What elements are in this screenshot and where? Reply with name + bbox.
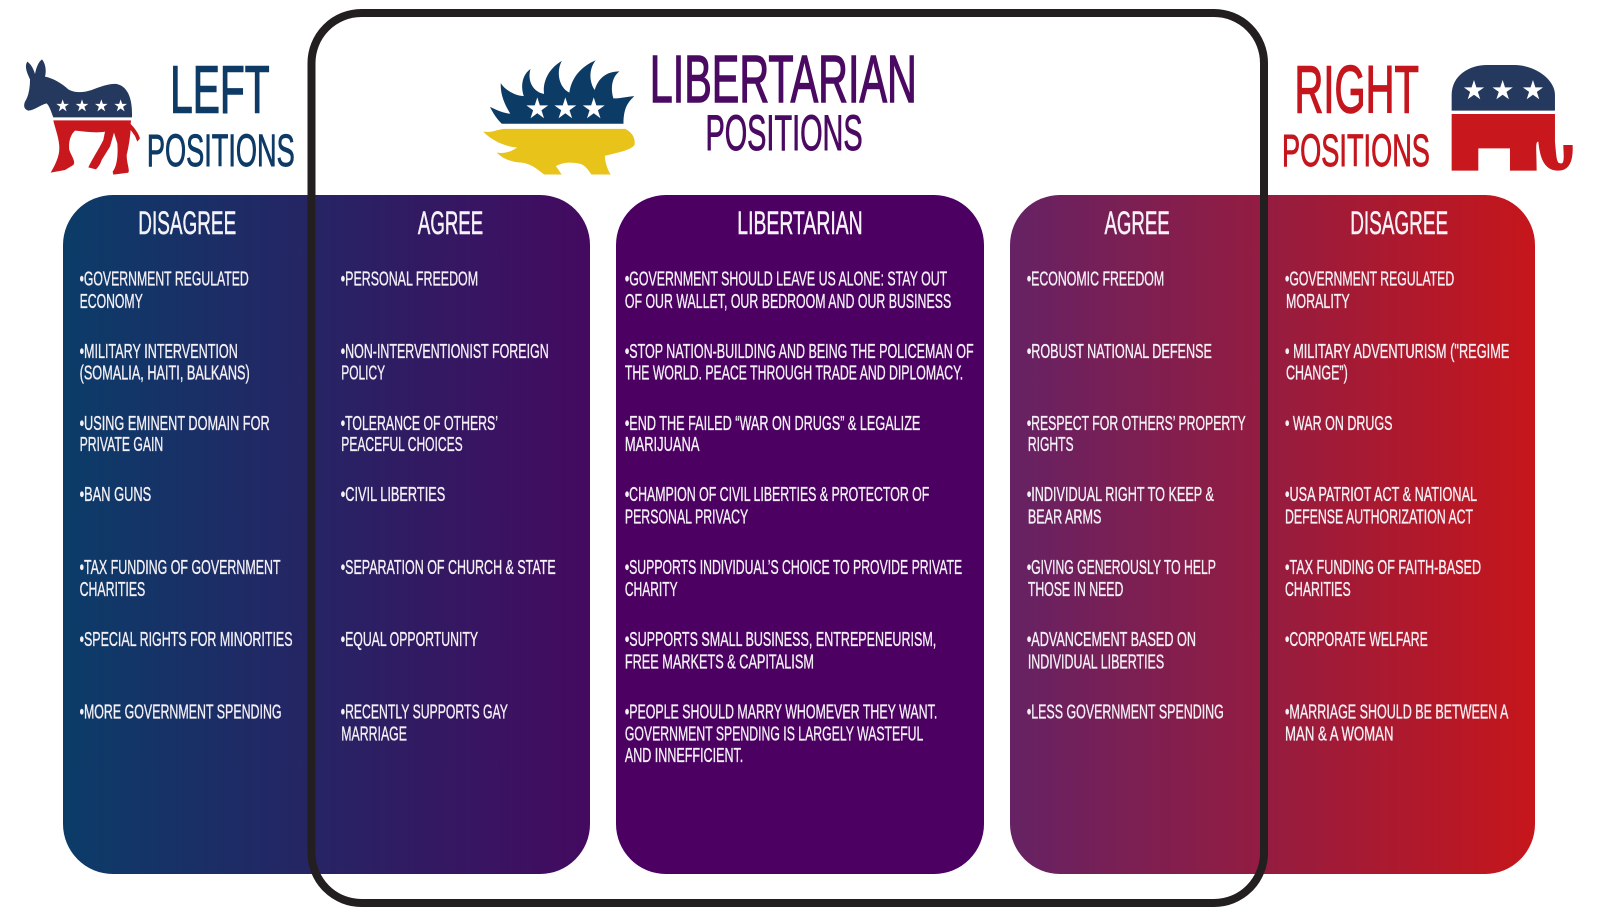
list: left agree positions: •CIVIL LIBERTIES: [341, 484, 445, 506]
list: right agree positions: •ADVANCEMENT BASED ON: [1027, 629, 1196, 651]
list: right agree positions: •LESS GOVERNMENT SPENDING: [1027, 701, 1224, 724]
panel: libertarian center: [616, 195, 984, 874]
list: right agree positions: •ECONOMIC FREEDOM: [1027, 268, 1164, 291]
icon: republican elephant: [1452, 65, 1573, 171]
list: libertarian positions: •SUPPORTS SMALL BUSINESS, ENTREPENEURISM,: [625, 629, 936, 651]
list: left agree positions: •SEPARATION OF CHURCH & STATE: [341, 557, 556, 579]
title: libertarian positions: POSITIONS: [705, 105, 863, 161]
list: right disagree positions: MAN & A WOMAN: [1285, 723, 1393, 745]
list: libertarian positions: GOVERNMENT SPENDING IS LARGELY WASTEFUL: [625, 723, 923, 745]
list: libertarian positions: •END THE FAILED “WAR ON DRUGS” & LEGALIZE: [625, 413, 920, 435]
list: libertarian positions: FREE MARKETS & CAPITALISM: [625, 651, 814, 673]
list: left disagree positions: •GOVERNMENT REGULATED: [80, 268, 249, 291]
list: left agree positions: •TOLERANCE OF OTHERS’: [341, 413, 498, 435]
icon: libertarian porcupine: [483, 60, 635, 174]
list: left disagree positions: •TAX FUNDING OF GOVERNMENT: [80, 557, 281, 579]
list: libertarian positions: •GOVERNMENT SHOULD LEAVE US ALONE: STAY OUT: [625, 268, 947, 291]
list: libertarian positions: MARIJUANA: [625, 434, 700, 456]
list: left disagree positions: •MORE GOVERNMENT SPENDING: [80, 701, 282, 724]
title: left positions: [147, 53, 295, 176]
title: left positions: LEFT: [170, 53, 270, 128]
list: libertarian positions: THE WORLD. PEACE THROUGH TRADE AND DIPLOMACY.: [625, 363, 963, 385]
list: left disagree positions: CHARITIES: [80, 579, 145, 601]
list: right agree positions: •INDIVIDUAL RIGHT TO KEEP &: [1027, 484, 1214, 506]
list: right agree positions: •ROBUST NATIONAL DEFENSE: [1027, 341, 1212, 363]
list: left agree positions: PEACEFUL CHOICES: [341, 434, 463, 456]
list: libertarian positions: CHARITY: [625, 579, 678, 601]
list: right agree positions: •GIVING GENEROUSLY TO HELP: [1027, 557, 1216, 579]
list: left agree positions: MARRIAGE: [341, 723, 407, 745]
list: left agree positions: •PERSONAL FREEDOM: [341, 268, 478, 291]
list: left agree positions: •NON-INTERVENTIONIST FOREIGN: [341, 341, 549, 363]
panel: left disagree and agree: [63, 195, 590, 874]
frame: libertarian overlap outline: [312, 13, 1264, 903]
list: left agree positions: •RECENTLY SUPPORTS GAY: [341, 701, 508, 724]
heading: right disagree: DISAGREE: [1350, 205, 1448, 241]
list: right disagree positions: CHANGE”): [1286, 363, 1348, 385]
list: right disagree positions: •GOVERNMENT REGULATED: [1285, 268, 1454, 291]
list: right disagree positions: DEFENSE AUTHORIZATION ACT: [1285, 507, 1473, 529]
title: libertarian positions: [650, 43, 917, 161]
list: left disagree positions: •BAN GUNS: [80, 484, 151, 506]
list: right disagree positions: CHARITIES: [1285, 579, 1351, 601]
list: right disagree positions: •CORPORATE WELFARE: [1285, 629, 1428, 651]
list: libertarian positions: •STOP NATION-BUILDING AND BEING THE POLICEMAN OF: [625, 341, 974, 363]
heading: right agree: AGREE: [1104, 205, 1170, 241]
list: right agree positions: [1027, 268, 1246, 724]
list: right disagree positions: •TAX FUNDING OF FAITH-BASED: [1285, 557, 1481, 579]
title: left positions: POSITIONS: [147, 125, 295, 176]
list: left agree positions: •EQUAL OPPORTUNITY: [341, 629, 478, 651]
panel: right agree and disagree: [1010, 195, 1535, 874]
list: left disagree positions: •SPECIAL RIGHTS FOR MINORITIES: [80, 629, 293, 651]
heading: left disagree: DISAGREE: [138, 205, 236, 241]
list: right agree positions: THOSE IN NEED: [1028, 579, 1123, 601]
title: libertarian positions: LIBERTARIAN: [650, 43, 917, 117]
icon: democrat donkey: [24, 59, 140, 175]
list: left disagree positions: [80, 268, 293, 724]
list: left agree positions: POLICY: [341, 363, 385, 385]
list: right agree positions: INDIVIDUAL LIBERTIES: [1028, 651, 1164, 673]
title: right positions: [1282, 53, 1430, 176]
list: libertarian positions: OF OUR WALLET, OUR BEDROOM AND OUR BUSINESS: [625, 291, 951, 313]
list: left disagree positions: ECONOMY: [80, 291, 143, 313]
list: libertarian positions: [625, 268, 974, 767]
list: libertarian positions: PERSONAL PRIVACY: [625, 507, 748, 529]
heading: libertarian: LIBERTARIAN: [737, 205, 863, 241]
list: right disagree positions: MORALITY: [1286, 291, 1350, 313]
list: right disagree positions: •USA PATRIOT ACT & NATIONAL: [1285, 484, 1477, 506]
title: right positions: RIGHT: [1294, 53, 1419, 128]
title: right positions: POSITIONS: [1282, 125, 1430, 176]
list: right disagree positions: • WAR ON DRUGS: [1285, 413, 1393, 435]
list: right agree positions: BEAR ARMS: [1028, 507, 1101, 529]
list: left disagree positions: •MILITARY INTERVENTION: [80, 341, 238, 363]
list: libertarian positions: •PEOPLE SHOULD MARRY WHOMEVER THEY WANT.: [625, 701, 937, 724]
list: libertarian positions: AND INNEFFICIENT.: [625, 745, 743, 767]
list: right agree positions: RIGHTS: [1028, 434, 1074, 456]
list: right disagree positions: [1285, 268, 1509, 745]
list: libertarian positions: •SUPPORTS INDIVIDUAL’S CHOICE TO PROVIDE PRIVATE: [625, 557, 962, 579]
list: left disagree positions: PRIVATE GAIN: [80, 434, 163, 456]
list: left disagree positions: •USING EMINENT DOMAIN FOR: [80, 413, 270, 435]
list: left agree positions: [341, 268, 556, 745]
list: left disagree positions: (SOMALIA, HAITI, BALKANS): [80, 363, 250, 385]
list: libertarian positions: •CHAMPION OF CIVIL LIBERTIES & PROTECTOR OF: [625, 484, 929, 506]
heading: left agree: AGREE: [418, 205, 483, 241]
list: right agree positions: •RESPECT FOR OTHERS’ PROPERTY: [1027, 413, 1246, 435]
